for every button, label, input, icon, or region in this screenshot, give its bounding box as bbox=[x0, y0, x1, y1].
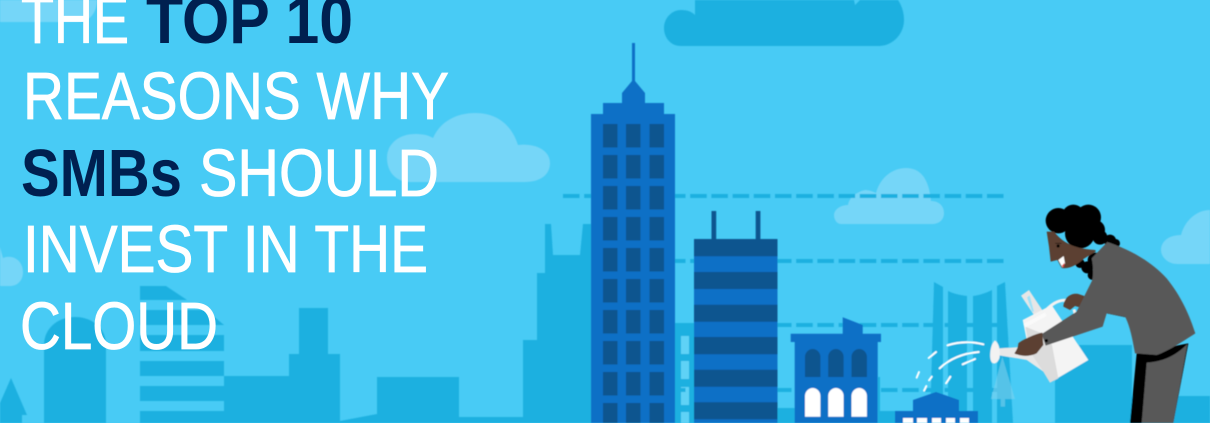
arched building bbox=[791, 317, 881, 423]
water spray bbox=[917, 342, 983, 391]
black stripe bbox=[1130, 343, 1188, 423]
cloud: top dark bbox=[664, 0, 904, 46]
ground strip bbox=[777, 377, 895, 423]
face bbox=[1047, 232, 1096, 268]
striped tower bbox=[694, 211, 778, 423]
faint droplet tree bbox=[991, 357, 1015, 407]
cloud: left edge light bbox=[0, 247, 23, 286]
pants bbox=[1130, 343, 1188, 423]
building behind second tower bbox=[675, 323, 694, 423]
dashed guide lines bbox=[563, 196, 1005, 390]
cloud: far right light bbox=[1161, 210, 1210, 264]
cloud: centre light bbox=[387, 113, 550, 182]
title line 3: SMBs bbox=[21, 136, 182, 211]
can spout bbox=[999, 347, 1043, 372]
near hand bbox=[1014, 333, 1043, 356]
title line 5: CLOUD bbox=[20, 289, 218, 364]
can rear handle bbox=[1043, 300, 1066, 313]
title line 3 bbox=[21, 136, 439, 211]
curly hair bbox=[1046, 205, 1120, 248]
watering can bbox=[990, 290, 1088, 383]
woman watering with can bbox=[917, 205, 1195, 423]
can body bbox=[1023, 305, 1088, 383]
can handle top bbox=[1021, 290, 1043, 317]
can shaded left face bbox=[1025, 327, 1058, 383]
dark arched windows bbox=[805, 349, 867, 377]
twin peak building bbox=[523, 224, 592, 423]
smile bbox=[1058, 256, 1065, 267]
title line 2: REASONS WHY bbox=[23, 59, 449, 134]
inner shirt shadow bbox=[1107, 283, 1126, 317]
title bbox=[20, 0, 449, 364]
eye bbox=[1055, 243, 1061, 247]
small bank building bbox=[895, 392, 978, 423]
curved skyscraper bbox=[930, 282, 1013, 423]
right building block bbox=[1055, 345, 1210, 423]
tower windows bbox=[603, 124, 664, 423]
building body bbox=[791, 317, 881, 423]
dark stripes and antennas bbox=[694, 211, 778, 419]
skyscraper bbox=[591, 43, 675, 423]
bank body bbox=[895, 392, 978, 423]
striped building bbox=[140, 286, 224, 423]
title line 1 bbox=[21, 0, 353, 58]
skyline: background buildings bbox=[0, 224, 1210, 423]
can rose bbox=[990, 340, 1000, 364]
title line 3: SHOULD bbox=[199, 136, 439, 211]
tower body bbox=[591, 43, 675, 423]
cloud: right middle light bbox=[834, 168, 944, 224]
windows of background building bbox=[681, 336, 689, 423]
domed building bbox=[44, 317, 106, 423]
title line 4: INVEST IN THE bbox=[23, 212, 428, 287]
bank windows bbox=[903, 418, 969, 423]
can top strip bbox=[1023, 313, 1047, 327]
jacket bbox=[1042, 242, 1195, 355]
tower body bbox=[694, 239, 778, 423]
cloud: top left light bbox=[0, 0, 97, 22]
far hand bbox=[1063, 294, 1088, 310]
stepped tower bbox=[224, 308, 523, 423]
white arched windows bbox=[805, 388, 867, 417]
hair braid at neck bbox=[1075, 253, 1102, 280]
tree silhouette bbox=[0, 378, 27, 423]
cuff button bbox=[1045, 339, 1048, 342]
grey leg bbox=[1142, 344, 1187, 423]
